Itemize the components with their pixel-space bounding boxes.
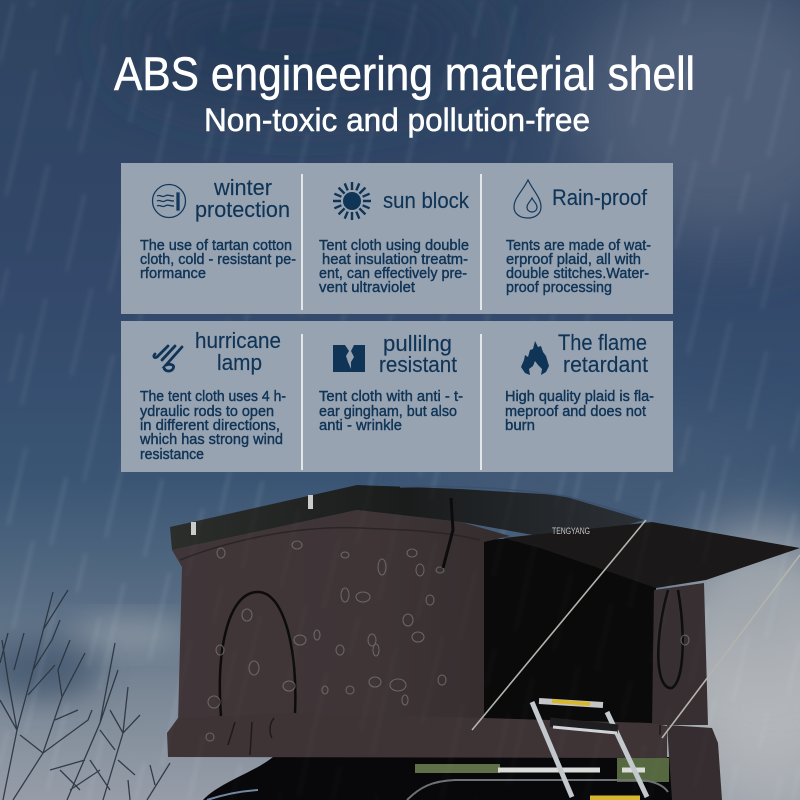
body text: proof processing xyxy=(506,280,612,296)
tent: shell clips xyxy=(191,495,313,535)
tent: brand mark: TENGYANG xyxy=(552,526,590,536)
body text: High quality plaid is fla- xyxy=(505,389,654,405)
heading: resistant xyxy=(379,352,457,377)
feature: the flame retardant xyxy=(505,330,654,434)
body text: The tent cloth uses 4 h- xyxy=(140,389,286,405)
heading: hurricane xyxy=(195,328,281,353)
tent: right side wall xyxy=(652,583,708,725)
heading: pullilng xyxy=(383,331,452,356)
tent: lower skirt xyxy=(167,713,667,758)
tent: window arch xyxy=(220,592,295,716)
panel: bottom row of features xyxy=(121,321,673,472)
heading: sun block xyxy=(383,188,470,213)
body text: heat insulation treatm- xyxy=(322,252,468,268)
body text: burn xyxy=(505,418,535,434)
body text: vent ultraviolet xyxy=(319,280,415,296)
heading: lamp xyxy=(217,350,262,375)
icon: flame xyxy=(521,341,549,375)
body text: Tent cloth with anti - t- xyxy=(319,389,463,405)
body text: rformance xyxy=(140,266,206,282)
icon: sun xyxy=(333,182,371,220)
rooftop tent xyxy=(167,485,800,800)
tent: doorway xyxy=(484,530,656,725)
body text: which has strong wind xyxy=(139,432,283,448)
body text: Tents are made of wat- xyxy=(506,238,651,254)
body text: double stitches.Water- xyxy=(506,266,649,282)
body text: The use of tartan cotton xyxy=(140,238,292,254)
body text: cloth, cold - resistant pe- xyxy=(140,252,296,268)
body text: in different directions, xyxy=(140,418,280,434)
tent: awning xyxy=(503,522,800,588)
bare tree branches xyxy=(0,590,170,800)
body text: resistance xyxy=(140,447,204,463)
heading: The flame xyxy=(558,330,647,355)
rain overlay on tent xyxy=(0,480,800,800)
body text: ear gingham, but also xyxy=(319,404,457,420)
feature: hurricane lamp xyxy=(139,328,286,463)
heading: retardant xyxy=(563,352,648,377)
heading: winter xyxy=(213,175,272,200)
subtitle: Non-toxic and pollution-free xyxy=(204,102,590,138)
body text: Tent cloth using double xyxy=(319,238,469,254)
feature: pulling resistant xyxy=(319,331,463,434)
title: ABS engineering material shell xyxy=(114,47,695,100)
panel: top row of features xyxy=(121,163,673,314)
heading: Rain-proof xyxy=(552,185,648,210)
car and roof rack under tent xyxy=(203,757,672,800)
icon: torn fabric xyxy=(333,345,365,372)
tent: hard ABS shell xyxy=(170,485,644,550)
body text: erproof plaid, all with xyxy=(506,252,641,268)
tent: support poles xyxy=(472,520,800,738)
feature: winter protection xyxy=(140,175,296,282)
tent: strap xyxy=(443,498,453,568)
body text: anti - wrinkle xyxy=(319,418,402,434)
body text: ydraulic rods to open xyxy=(140,404,274,420)
tent: right flap xyxy=(667,725,722,800)
tent: skirt folds xyxy=(228,718,660,755)
feature: sun block xyxy=(319,182,470,296)
icon: insulation circle xyxy=(152,184,186,218)
tent: water droplets xyxy=(206,541,689,741)
icon: wind and rain xyxy=(154,346,182,371)
heading: protection xyxy=(195,197,290,222)
tent: main cloth body xyxy=(172,510,510,722)
body text: ent, can effectively pre- xyxy=(319,266,467,282)
ladder xyxy=(532,701,647,798)
feature: rain-proof xyxy=(506,180,651,296)
icon: water drop xyxy=(514,180,541,218)
body text: meproof and does not xyxy=(505,404,646,420)
